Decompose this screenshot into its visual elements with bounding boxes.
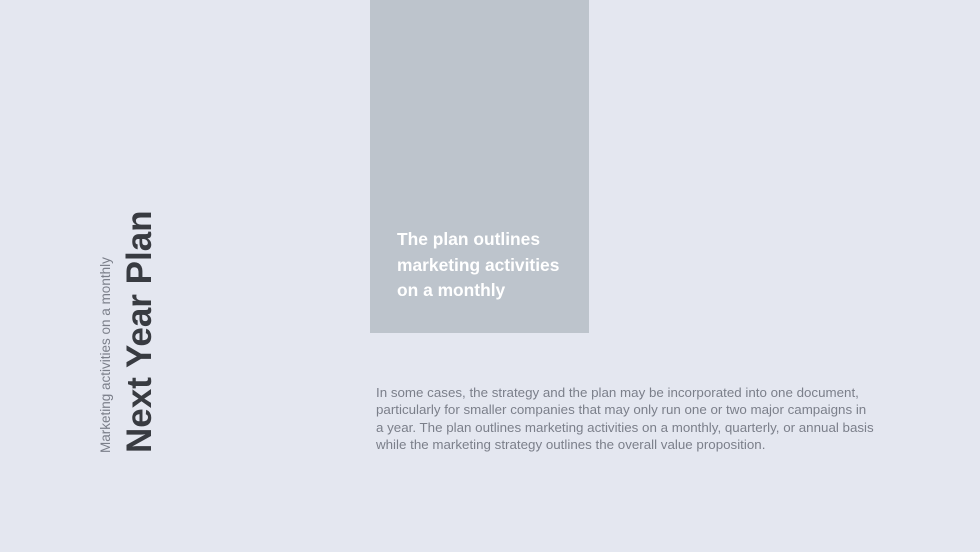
body paragraph: while the marketing strategy outlines the overall value proposition. <box>376 437 765 452</box>
vertical subtitle: Marketing activities on a monthly <box>98 257 112 453</box>
panel text: plan outlines <box>397 229 559 300</box>
body paragraph: particularly for smaller companies that may only run one or two major campaigns in <box>376 402 866 417</box>
panel text: plan outlines: on a monthly <box>397 280 505 300</box>
vertical title: Next Year Plan <box>120 210 159 453</box>
panel text: plan outlines: marketing activities <box>397 254 559 274</box>
panel: grey rectangle <box>370 0 589 333</box>
body paragraph: a year. The plan outlines marketing activities on a monthly, quarterly, or annual basis <box>376 420 874 435</box>
body paragraph: In some cases, the strategy and the plan may be incorporated into one document, <box>376 384 859 400</box>
body paragraph <box>376 384 874 452</box>
panel text: plan outlines: The plan outlines <box>397 229 540 249</box>
